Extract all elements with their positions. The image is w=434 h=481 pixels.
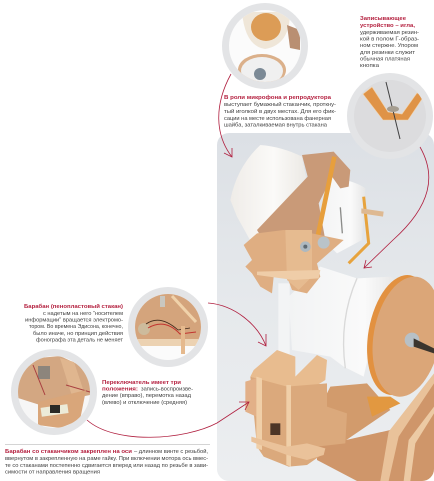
wood back xyxy=(18,356,90,405)
text: recording device: ном стержне. Упором xyxy=(360,43,418,49)
text: drum on axis: Барабан со стаканчиком закреплен на оси xyxy=(5,448,133,455)
lower right wood body xyxy=(327,383,390,440)
motor xyxy=(138,323,150,335)
text: recording device: кнопка xyxy=(360,63,380,69)
column base block xyxy=(250,350,327,386)
text: recording device xyxy=(360,16,419,69)
text: microphone and reproducer: сации на месте использована фанерная xyxy=(224,116,331,122)
text: drum: с надетым на него “носителем xyxy=(43,311,123,317)
needle rod xyxy=(340,207,342,233)
text: switch: (влево) и отключение (средняя) xyxy=(102,400,187,406)
circle: needle close-up xyxy=(347,73,433,140)
text: drum on axis: ввернутом в закрепленную на раме гайку. При включении мотора ось вмес- xyxy=(5,455,208,462)
wood corner xyxy=(287,25,300,50)
switch body xyxy=(41,404,69,417)
circle: microphone cup close-up xyxy=(222,3,308,89)
wooden peg xyxy=(361,208,384,217)
text: switch: запись-воспроизве- xyxy=(141,386,193,392)
frame plate two xyxy=(404,407,434,481)
grey photo backdrop xyxy=(217,133,434,481)
base plank vertical left xyxy=(256,377,262,450)
left tab xyxy=(245,378,256,417)
base dark slot xyxy=(270,423,280,435)
text: drum: тором. Во времена Эдисона, конечно, xyxy=(29,324,123,330)
arrow: needle to drum xyxy=(364,147,429,268)
screw plate xyxy=(160,296,165,307)
wood floor xyxy=(135,339,201,346)
dark wires xyxy=(146,320,190,330)
base plank vertical right xyxy=(286,385,291,467)
orange back disk xyxy=(367,275,415,395)
upper white cup xyxy=(230,145,306,240)
white column xyxy=(278,284,290,354)
text: drum: было иначе, но принцип действия xyxy=(33,330,123,337)
arrow: switch to base xyxy=(87,402,249,437)
disk bolt xyxy=(405,333,434,353)
text: switch: положения: xyxy=(102,386,138,392)
phonograph machine photo xyxy=(230,145,434,481)
text: microphone and reproducer: шайба, заталкиваемая внутрь стакана xyxy=(224,122,328,128)
text: switch: Переключатель имеет три xyxy=(102,380,182,386)
text: drum on axis: симости от направления вращения xyxy=(5,470,100,476)
vertical wood plank xyxy=(60,358,84,396)
text: microphone and reproducer xyxy=(224,94,336,128)
tilted wood plate xyxy=(257,152,350,236)
orange L-shaped rod xyxy=(363,87,424,120)
wood front disk xyxy=(372,276,434,397)
needle xyxy=(386,82,400,139)
bracket plate xyxy=(285,230,312,290)
orange centre xyxy=(251,13,281,41)
wood wall xyxy=(135,294,201,340)
text: microphone and reproducer: В роли микрофона и репродуктора xyxy=(224,94,332,101)
switch slider xyxy=(50,405,60,413)
upper bracket xyxy=(244,230,344,293)
arrow: to microphone cup xyxy=(219,74,232,157)
text: drum: информации” вращается электромо- xyxy=(25,318,123,324)
text: drum xyxy=(24,303,123,344)
red wires xyxy=(33,365,90,395)
orange rubber band right xyxy=(349,197,369,263)
switch plate xyxy=(38,390,86,428)
text: switch xyxy=(102,380,193,406)
text: recording device: Записывающее xyxy=(360,16,406,22)
text: microphone and reproducer: выступает бумажный стаканчик, проткну- xyxy=(224,101,336,108)
text: drum on axis: те со стаканами постепенно сдвигается вперед или назад по резьбе в зави- xyxy=(5,463,208,469)
red wires xyxy=(148,324,196,334)
pin head xyxy=(387,106,399,112)
text: drum: Барабан (пенопластовый стакан) xyxy=(24,303,123,310)
right frame xyxy=(317,377,434,481)
steel bolts xyxy=(300,237,330,252)
base body xyxy=(250,377,347,467)
text: recording device: устройство – игла, xyxy=(360,22,415,29)
cup drum seam xyxy=(344,278,357,368)
text: switch: дение (вправо), перемотка назад xyxy=(102,393,192,399)
text: recording device: удерживаемая резин- xyxy=(360,30,419,36)
lower white cup drum xyxy=(290,266,386,376)
horizontal bracket plate xyxy=(257,270,320,280)
diagonal plank xyxy=(172,296,196,322)
text: recording device: для резинки служит xyxy=(360,50,415,56)
lower disk face xyxy=(241,57,283,82)
frame plates xyxy=(380,373,434,481)
red arrows xyxy=(87,74,429,437)
text: recording device: обычная платяная xyxy=(360,56,410,62)
text: drum: фонографа эта деталь не меняет xyxy=(36,338,123,344)
base bottom plate xyxy=(251,437,325,460)
drum support xyxy=(367,397,400,417)
text: drum on axis: – длинном винте с резьбой, xyxy=(134,448,208,455)
cup bottom xyxy=(242,12,290,49)
divider rule xyxy=(5,443,210,446)
smaller cup xyxy=(322,178,364,254)
text: microphone and reproducer: тый иголкой в двух местах. Для его фик- xyxy=(224,108,336,115)
circle: drum motor close-up xyxy=(128,287,208,367)
circle: switch close-up xyxy=(11,349,97,435)
lower disk label xyxy=(254,68,266,80)
text: drum on axis xyxy=(5,448,208,476)
switch plank xyxy=(181,326,185,354)
arrow: drum cup to base xyxy=(208,303,266,346)
text: recording device: кой в полом Г-образ- xyxy=(360,36,419,42)
lower disk ring xyxy=(238,54,286,82)
dark motor xyxy=(38,366,50,379)
orange rubber band xyxy=(317,157,334,240)
